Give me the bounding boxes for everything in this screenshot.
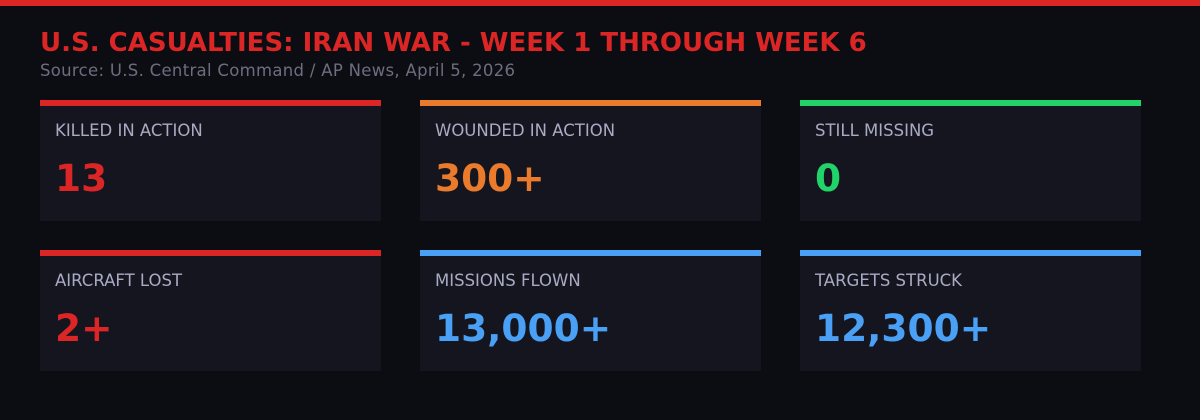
panel: aircraft lost: 2+ xyxy=(55,306,113,350)
panel: still missing xyxy=(800,100,1141,221)
panel: aircraft lost: AIRCRAFT LOST xyxy=(55,271,182,290)
panel: still missing: 0 xyxy=(815,156,841,200)
subtitle: source: Source: U.S. Central Command / AP News, April 5, 2026 xyxy=(40,61,515,80)
panel: targets struck: 12,300+ xyxy=(815,306,991,350)
panel: still missing: STILL MISSING xyxy=(815,121,934,140)
panel: wounded in action: WOUNDED IN ACTION xyxy=(435,121,615,140)
panel: missions flown: 13,000+ xyxy=(435,306,611,350)
panel: wounded in action xyxy=(420,100,761,221)
panel: targets struck: TARGETS STRUCK xyxy=(815,271,962,290)
panel: killed in action xyxy=(40,100,381,221)
panel: killed in action: KILLED IN ACTION xyxy=(55,121,203,140)
panel: killed in action: 13 xyxy=(55,156,107,200)
panel: wounded in action: 300+ xyxy=(435,156,545,200)
panel: aircraft lost xyxy=(40,250,381,371)
panel: missions flown: MISSIONS FLOWN xyxy=(435,271,581,290)
panel: targets struck xyxy=(800,250,1141,371)
panel: missions flown xyxy=(420,250,761,371)
title: U.S. CASUALTIES: IRAN WAR - WEEK 1 THROUGH WEEK 6 xyxy=(40,28,867,58)
